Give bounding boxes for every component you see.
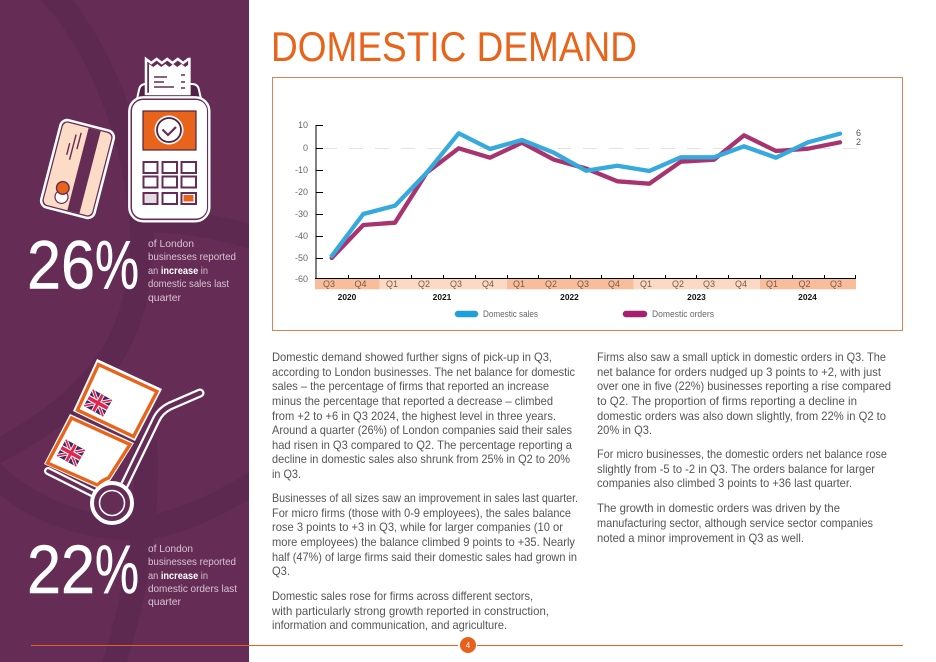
title: DOMESTIC DEMAND: [271, 23, 637, 70]
paragraph 6: noted a minor improvement in Q3 as well.: [597, 532, 804, 545]
legend: domestic orders: Domestic orders: [652, 309, 714, 319]
quarter labels: Q3: [450, 279, 462, 289]
quarter labels: [323, 279, 842, 289]
page number: 4: [466, 641, 471, 650]
keypad: [144, 162, 196, 204]
year labels: 2023: [687, 292, 706, 302]
paragraph 1: minus the percentage that reported a decrease – climbed: [272, 395, 553, 408]
year labels: 2022: [560, 292, 579, 302]
paragraph 2: Q3.: [272, 565, 290, 578]
text column: right: [597, 351, 891, 545]
wheel: [92, 483, 132, 523]
stat caption: sales: quarter: [148, 293, 182, 304]
paragraph 4: domestic orders was also down slightly, from 22% in Q2 to: [597, 410, 886, 423]
sidebar panel: [0, 0, 260, 662]
quarter labels: Q1: [386, 279, 398, 289]
quarter labels: Q4: [608, 279, 620, 289]
paragraph 4: to Q2. The proportion of firms reporting a decline in: [597, 395, 857, 408]
paragraph 5: companies also climbed 3 points to +36 last quarter.: [597, 477, 852, 490]
year labels: [338, 292, 817, 302]
paragraph 3: [271, 590, 549, 632]
icon: bank card: [40, 119, 115, 219]
paragraph 1: from +2 to +6 in Q3 2024, the highest level in three years.: [272, 410, 556, 423]
stat: 26%: %: [95, 226, 139, 304]
y axis labels: -20: [295, 187, 308, 197]
base plate: [48, 471, 96, 495]
paragraph 2: For micro firms (those with 0-9 employees), the sales balance: [272, 507, 571, 520]
quarter labels: Q3: [830, 279, 842, 289]
quarter labels: Q2: [798, 279, 811, 289]
paragraph 4: [597, 351, 891, 437]
paragraph 5: For micro businesses, the domestic orders net balance rose: [597, 448, 887, 461]
terminal body: [129, 97, 209, 221]
stat: 22%: 22: [27, 531, 95, 608]
icon: tick: [154, 116, 184, 144]
text column: left: [271, 351, 578, 632]
stat caption: sales: an increase in: [148, 266, 208, 277]
stat caption: sales: domestic sales last: [148, 279, 229, 290]
quarter labels: Q3: [577, 279, 589, 289]
y axis labels: -50: [295, 253, 308, 263]
stat caption: sales: of London: [148, 239, 194, 250]
quarter labels: Q4: [482, 279, 494, 289]
paragraph 3: Domestic sales rose for firms across different sectors,: [272, 590, 533, 603]
zero line: [323, 148, 858, 150]
y axis labels: 10: [298, 120, 308, 130]
stat: 26%: [27, 226, 236, 304]
quarter labels: Q2: [672, 279, 684, 289]
paragraph 1: Around a quarter (26%) of London companies said their sales: [272, 424, 572, 437]
paragraph 4: Firms also saw a small uptick in domestic orders in Q3. The: [597, 351, 886, 364]
quarter labels: Q3: [323, 279, 335, 289]
legend: domestic sales: [458, 309, 538, 319]
quarter labels: Q4: [354, 279, 367, 289]
quarter labels: Q3: [703, 279, 715, 289]
paragraph 4: net balance for orders nudged up 3 points to +2, with just: [597, 366, 882, 379]
quarter labels: Q1: [766, 279, 778, 289]
page number: [460, 637, 476, 653]
paragraph 5: slightly from -5 to -2 in Q3. The orders balance for larger: [597, 463, 875, 476]
paragraph 2: Businesses of all sizes saw an improvement in sales last quarter.: [272, 492, 578, 505]
legend: domestic orders: [626, 309, 714, 319]
y axis labels: -60: [295, 274, 308, 284]
stat: 22%: %: [95, 531, 139, 608]
terminal shoulders: [137, 84, 201, 99]
paragraph 1: decline in domestic sales also shrunk from 25% in Q2 to 20%: [272, 453, 570, 466]
paragraph 1: according to London businesses. The net balance for domestic: [272, 366, 575, 379]
quarter labels: Q4: [735, 279, 747, 289]
year labels: 2020: [338, 292, 357, 302]
stat caption: orders: domestic orders last: [148, 584, 237, 595]
paragraph 3: information and communication, and agriculture.: [272, 619, 507, 632]
paragraph 2: more employees) the balance climbed 9 points to +35. Nearly: [272, 536, 575, 549]
quarter labels: Q1: [640, 279, 652, 289]
end labels: [856, 128, 861, 147]
stat: 26%: 26: [27, 226, 95, 304]
stat caption: orders: an increase in: [148, 571, 208, 582]
quarter band: [315, 278, 856, 289]
year labels: 2024: [798, 292, 817, 302]
stat caption: sales: businesses reported: [148, 252, 236, 263]
y axis labels: -10: [295, 165, 308, 175]
paragraph 3: with particularly strong growth reported in construction,: [271, 605, 549, 618]
quarter labels: Q2: [545, 279, 557, 289]
paragraph 1: in Q3.: [272, 468, 301, 481]
legend: domestic sales: Domestic sales: [483, 309, 538, 319]
chart panel: [272, 78, 902, 330]
upper box: [73, 359, 162, 441]
quarter labels: Q2: [418, 279, 430, 289]
line: domestic sales: [332, 133, 840, 256]
handle: [122, 393, 200, 490]
end labels: 2: [856, 137, 861, 147]
paragraph 6: [597, 502, 873, 545]
paragraph 5: [597, 448, 887, 490]
axes: [315, 125, 856, 278]
paragraph 1: [272, 351, 575, 481]
stat: 22%: [27, 531, 237, 608]
paragraph 1: had risen in Q3 compared to Q2. The percentage reporting a: [272, 439, 573, 452]
quarter labels: Q1: [513, 279, 525, 289]
y axis labels: 0: [303, 143, 308, 153]
icon: card terminal: [129, 59, 209, 221]
stat caption: sales: [148, 239, 236, 304]
stat caption: orders: businesses reported: [148, 557, 236, 568]
paragraph 1: Domestic demand showed further signs of pick-up in Q3,: [272, 351, 552, 364]
paragraph 4: over one in five (22%) businesses reporting a rise compared: [597, 380, 891, 393]
y axis labels: -40: [295, 231, 308, 241]
paragraph 2: rose 3 points to +3 in Q3, while for larger companies (10 or: [272, 521, 563, 534]
y axis labels: [295, 120, 308, 284]
y axis labels: -30: [295, 209, 308, 219]
terminal screen: [143, 111, 196, 150]
lower box: [44, 414, 134, 489]
receipt: [146, 59, 189, 95]
stat caption: orders: quarter: [148, 597, 182, 608]
year labels: 2021: [433, 292, 452, 302]
paragraph 4: 20% in Q3.: [597, 424, 652, 437]
footer rule: [31, 644, 903, 646]
line: domestic orders: [332, 135, 840, 258]
paragraph 6: The growth in domestic orders was driven by the: [597, 502, 840, 515]
paragraph 2: [272, 492, 578, 578]
stat caption: orders: [148, 544, 237, 608]
paragraph 6: manufacturing sector, although service sector companies: [597, 517, 873, 530]
end labels: 6: [856, 128, 861, 138]
icon: hand truck with boxes: [44, 359, 200, 523]
flags: [57, 389, 112, 467]
paragraph 2: half (47%) of large firms said their domestic sales had grown in: [272, 551, 577, 564]
paragraph 1: sales – the percentage of firms that reported an increase: [272, 380, 549, 393]
stat caption: orders: of London: [148, 544, 193, 555]
